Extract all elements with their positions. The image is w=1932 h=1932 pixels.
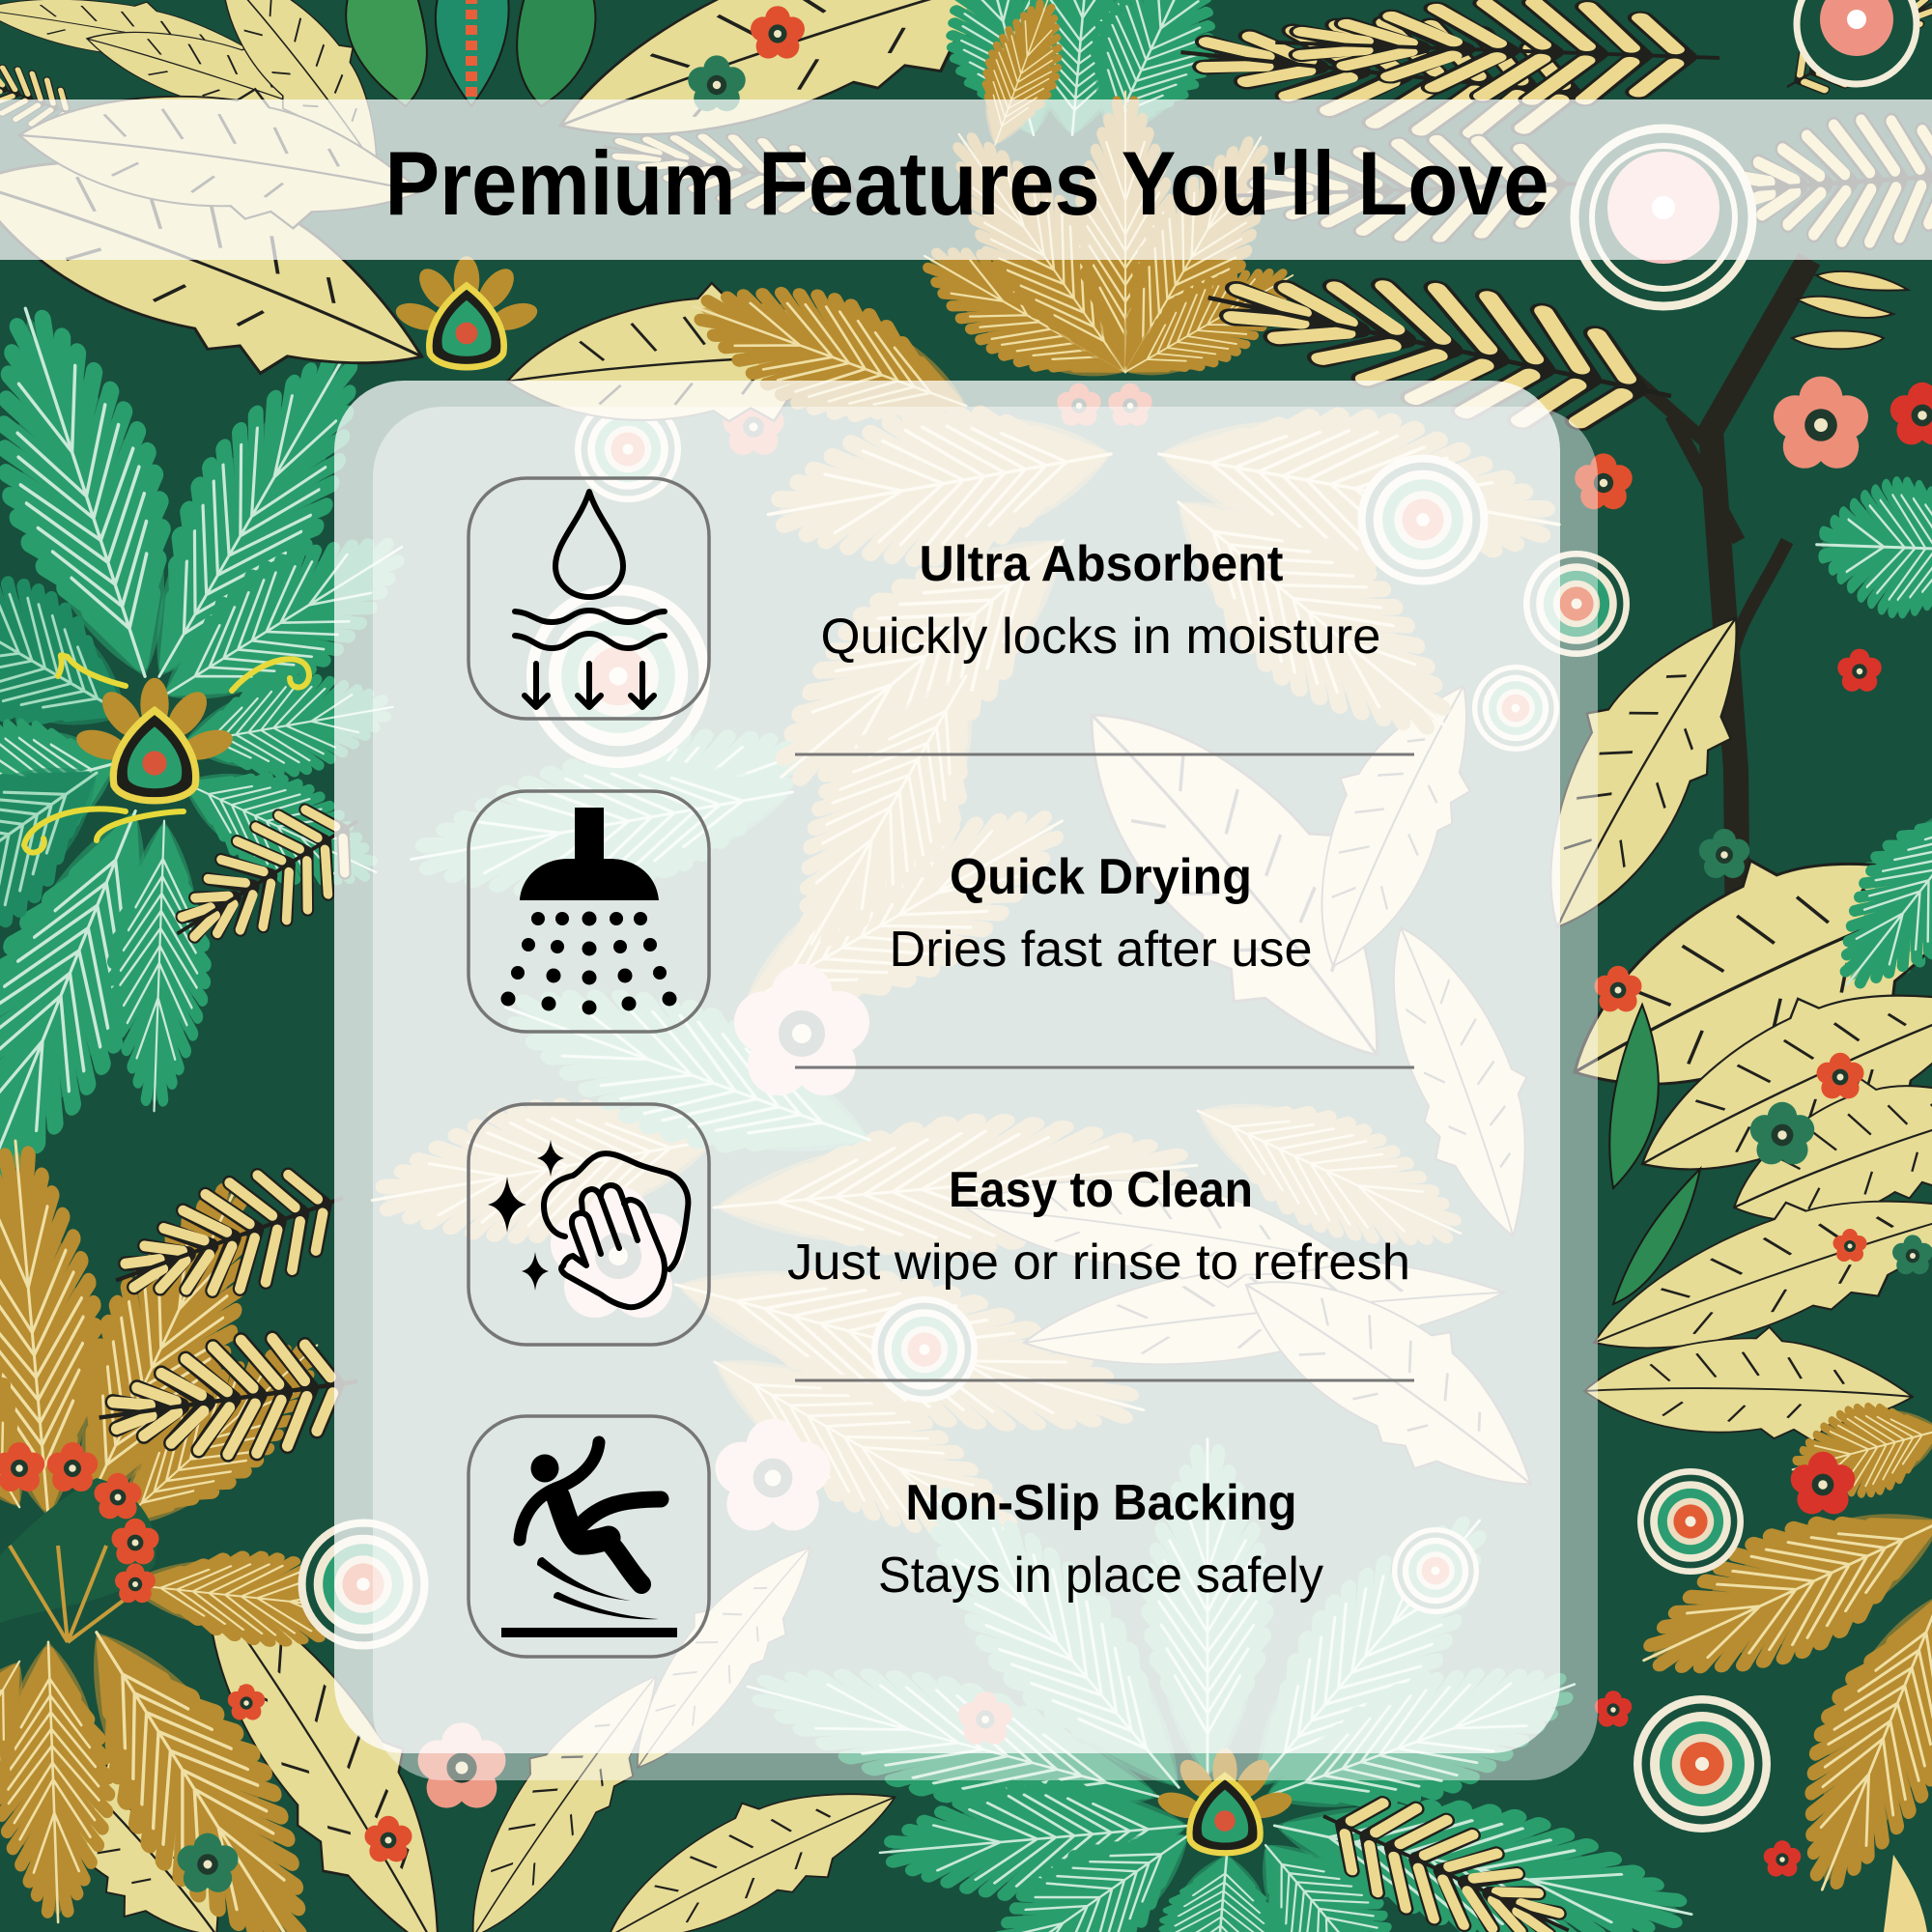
- heading: Easy to Clean: [949, 1162, 1253, 1218]
- feature row: Ultra Absorbent: [469, 478, 1381, 719]
- panel: back glass card: [373, 407, 1598, 1780]
- top right flower: [1575, 0, 1932, 1018]
- feature row: Non-Slip Backing: [469, 1416, 1323, 1657]
- description: Dries fast after use: [889, 922, 1312, 978]
- centre-top gold palm: [901, 92, 1312, 412]
- description: Just wipe or rinse to refresh: [787, 1235, 1410, 1291]
- bottom palm: [298, 1519, 1703, 1932]
- right gold fronds and medallions: [1595, 1388, 1932, 1932]
- yellow leaves behind title band and peacock motif: [0, 58, 985, 458]
- divider 3: [795, 1379, 1414, 1381]
- panel: front glass card: [334, 381, 1560, 1753]
- faint centre leaves and fronds under panel: [361, 383, 1630, 1850]
- icon: hand wiping with sparkles: [469, 1104, 709, 1345]
- divider 2: [795, 1066, 1414, 1068]
- icon: water drop absorbing: [469, 478, 709, 719]
- right banana leaves: [1487, 578, 1932, 1443]
- top row leaves: [0, 0, 1932, 193]
- left feathers and gold palm: [0, 780, 504, 1932]
- icon: person slipping: [469, 1416, 709, 1657]
- left palm teal: [0, 286, 431, 1213]
- title band: [0, 99, 1932, 260]
- feature row: Quick Drying: [469, 791, 1312, 1032]
- divider 1: [795, 753, 1414, 755]
- heading: Ultra Absorbent: [920, 536, 1283, 592]
- description: Quickly locks in moisture: [821, 609, 1381, 665]
- heading: Quick Drying: [950, 849, 1252, 905]
- icon: shower head: [469, 791, 709, 1032]
- tree trunk and right feather: [1196, 135, 1932, 1043]
- feature row: Easy to Clean: [469, 1104, 1410, 1345]
- title: Premium Features You'll Love: [384, 132, 1549, 234]
- heading: Non-Slip Backing: [906, 1475, 1296, 1531]
- description: Stays in place safely: [878, 1548, 1323, 1604]
